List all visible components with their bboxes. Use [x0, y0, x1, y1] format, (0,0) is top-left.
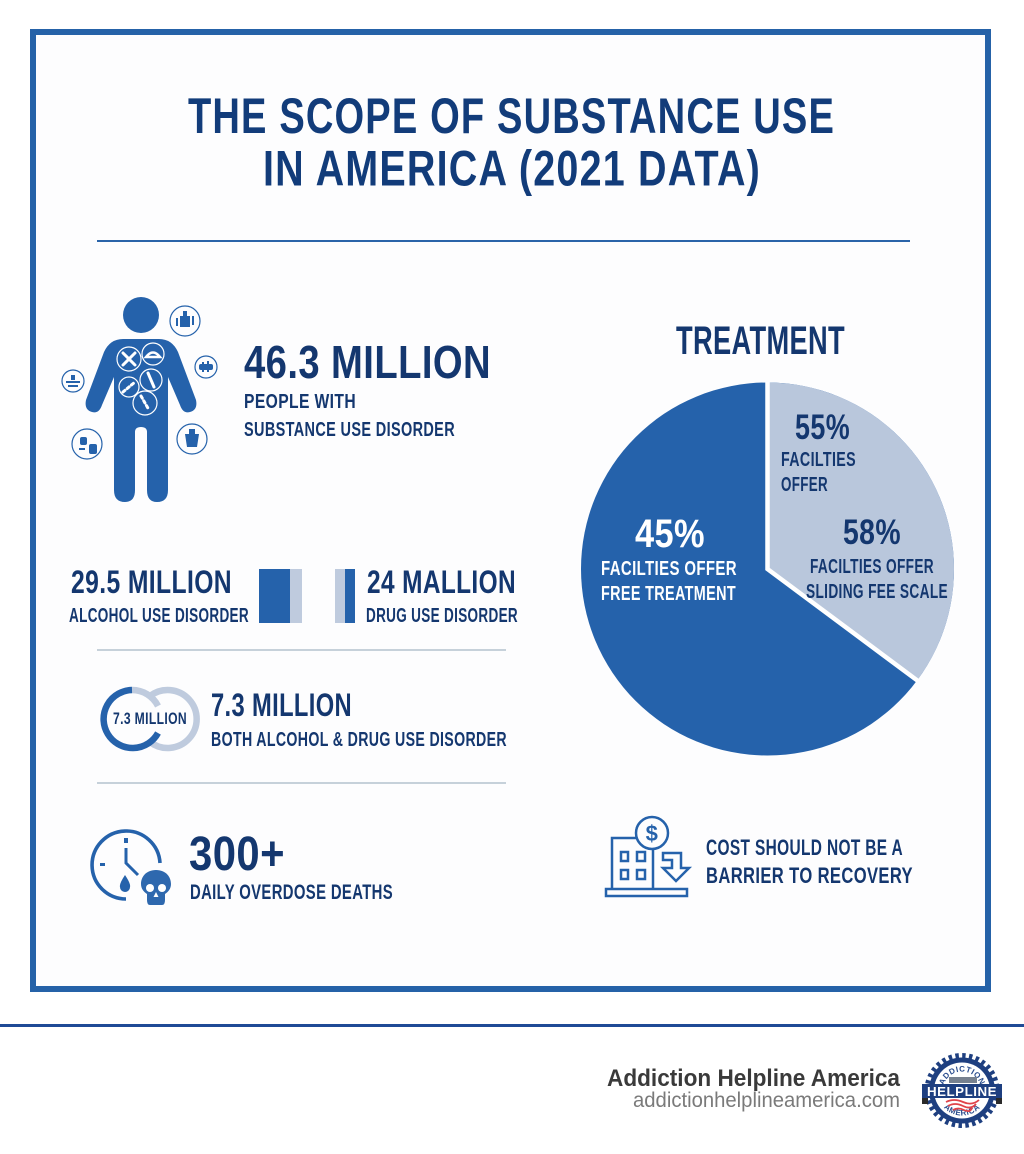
label: 45% free treatment: FACILTIES OFFER: [601, 557, 737, 580]
stat: both disorders: BOTH ALCOHOL & DRUG USE DISORDER: [211, 728, 507, 751]
stat: drug use disorder: DRUG USE DISORDER: [366, 604, 518, 627]
stat: both disorders: [211, 687, 507, 751]
footer brand text: addictionhelplineamerica.com: [633, 1089, 900, 1112]
bar: alcohol share: [259, 569, 302, 623]
stat: 46.3 million: SUBSTANCE USE DISORDER: [244, 418, 455, 441]
stat: alcohol use disorder: ALCOHOL USE DISORDER: [69, 604, 249, 627]
bar: drug share: [335, 569, 355, 623]
logo badge: ADDICTION: [940, 1066, 985, 1084]
logo badge: AMERICA: [944, 1104, 980, 1116]
icon: building with dollar and down arrow: $: [646, 821, 658, 846]
stat: overdose deaths: [189, 828, 393, 904]
footer rule: [0, 1024, 1024, 1027]
logo badge: [922, 1053, 1002, 1128]
label: 58% sliding fee scale: FACILTIES OFFER: [810, 556, 934, 578]
callout: cost message: BARRIER TO RECOVERY: [706, 863, 913, 888]
title: THE SCOPE OF SUBSTANCE USE: [188, 88, 835, 144]
label: 55% facilities offer: OFFER: [781, 474, 828, 496]
stat: 46.3 million: [244, 336, 491, 441]
label: 58% sliding fee scale: SLIDING FEE SCALE: [806, 581, 948, 603]
heading: treatment: TREATMENT: [676, 319, 845, 363]
stat: drug use disorder: [366, 564, 518, 627]
stat: alcohol use disorder: [69, 564, 249, 627]
stat: overdose deaths: 300+: [189, 828, 285, 881]
label: 45% free treatment: [601, 512, 737, 605]
footer brand text: Addiction Helpline America: [607, 1065, 901, 1092]
callout: cost message: [706, 835, 913, 888]
label: 55% facilities offer: [781, 408, 856, 496]
label: 45% free treatment: FREE TREATMENT: [601, 582, 736, 605]
footer brand text: [607, 1065, 901, 1112]
icon: overlapping rings: 7.3 MILLION: [113, 709, 187, 728]
icon: building with dollar and down arrow: [606, 817, 689, 896]
label: 55% facilities offer: 55%: [795, 408, 850, 447]
icon: clock with drop and skull: [92, 831, 171, 905]
stat: drug use disorder: 24 MALLION: [367, 564, 516, 600]
stat: 46.3 million: PEOPLE WITH: [244, 390, 356, 413]
icon: human figure with substance symbols: [62, 297, 217, 502]
label: 55% facilities offer: FACILTIES: [781, 449, 856, 471]
title: IN AMERICA (2021 DATA): [263, 140, 761, 196]
stat: 46.3 million: 46.3 MILLION: [244, 336, 491, 388]
logo badge: HELPLINE: [927, 1084, 997, 1099]
label: 58% sliding fee scale: [806, 513, 948, 603]
callout: cost message: COST SHOULD NOT BE A: [706, 835, 903, 860]
stat: overdose deaths: DAILY OVERDOSE DEATHS: [190, 881, 393, 904]
stat: alcohol use disorder: 29.5 MILLION: [71, 564, 232, 600]
label: 58% sliding fee scale: 58%: [843, 513, 901, 552]
title: [188, 88, 835, 196]
pie chart: [581, 382, 954, 756]
stat: both disorders: 7.3 MILLION: [211, 687, 352, 723]
label: 45% free treatment: 45%: [635, 512, 705, 556]
outer frame: [33, 32, 988, 989]
icon: overlapping rings: [104, 690, 197, 748]
